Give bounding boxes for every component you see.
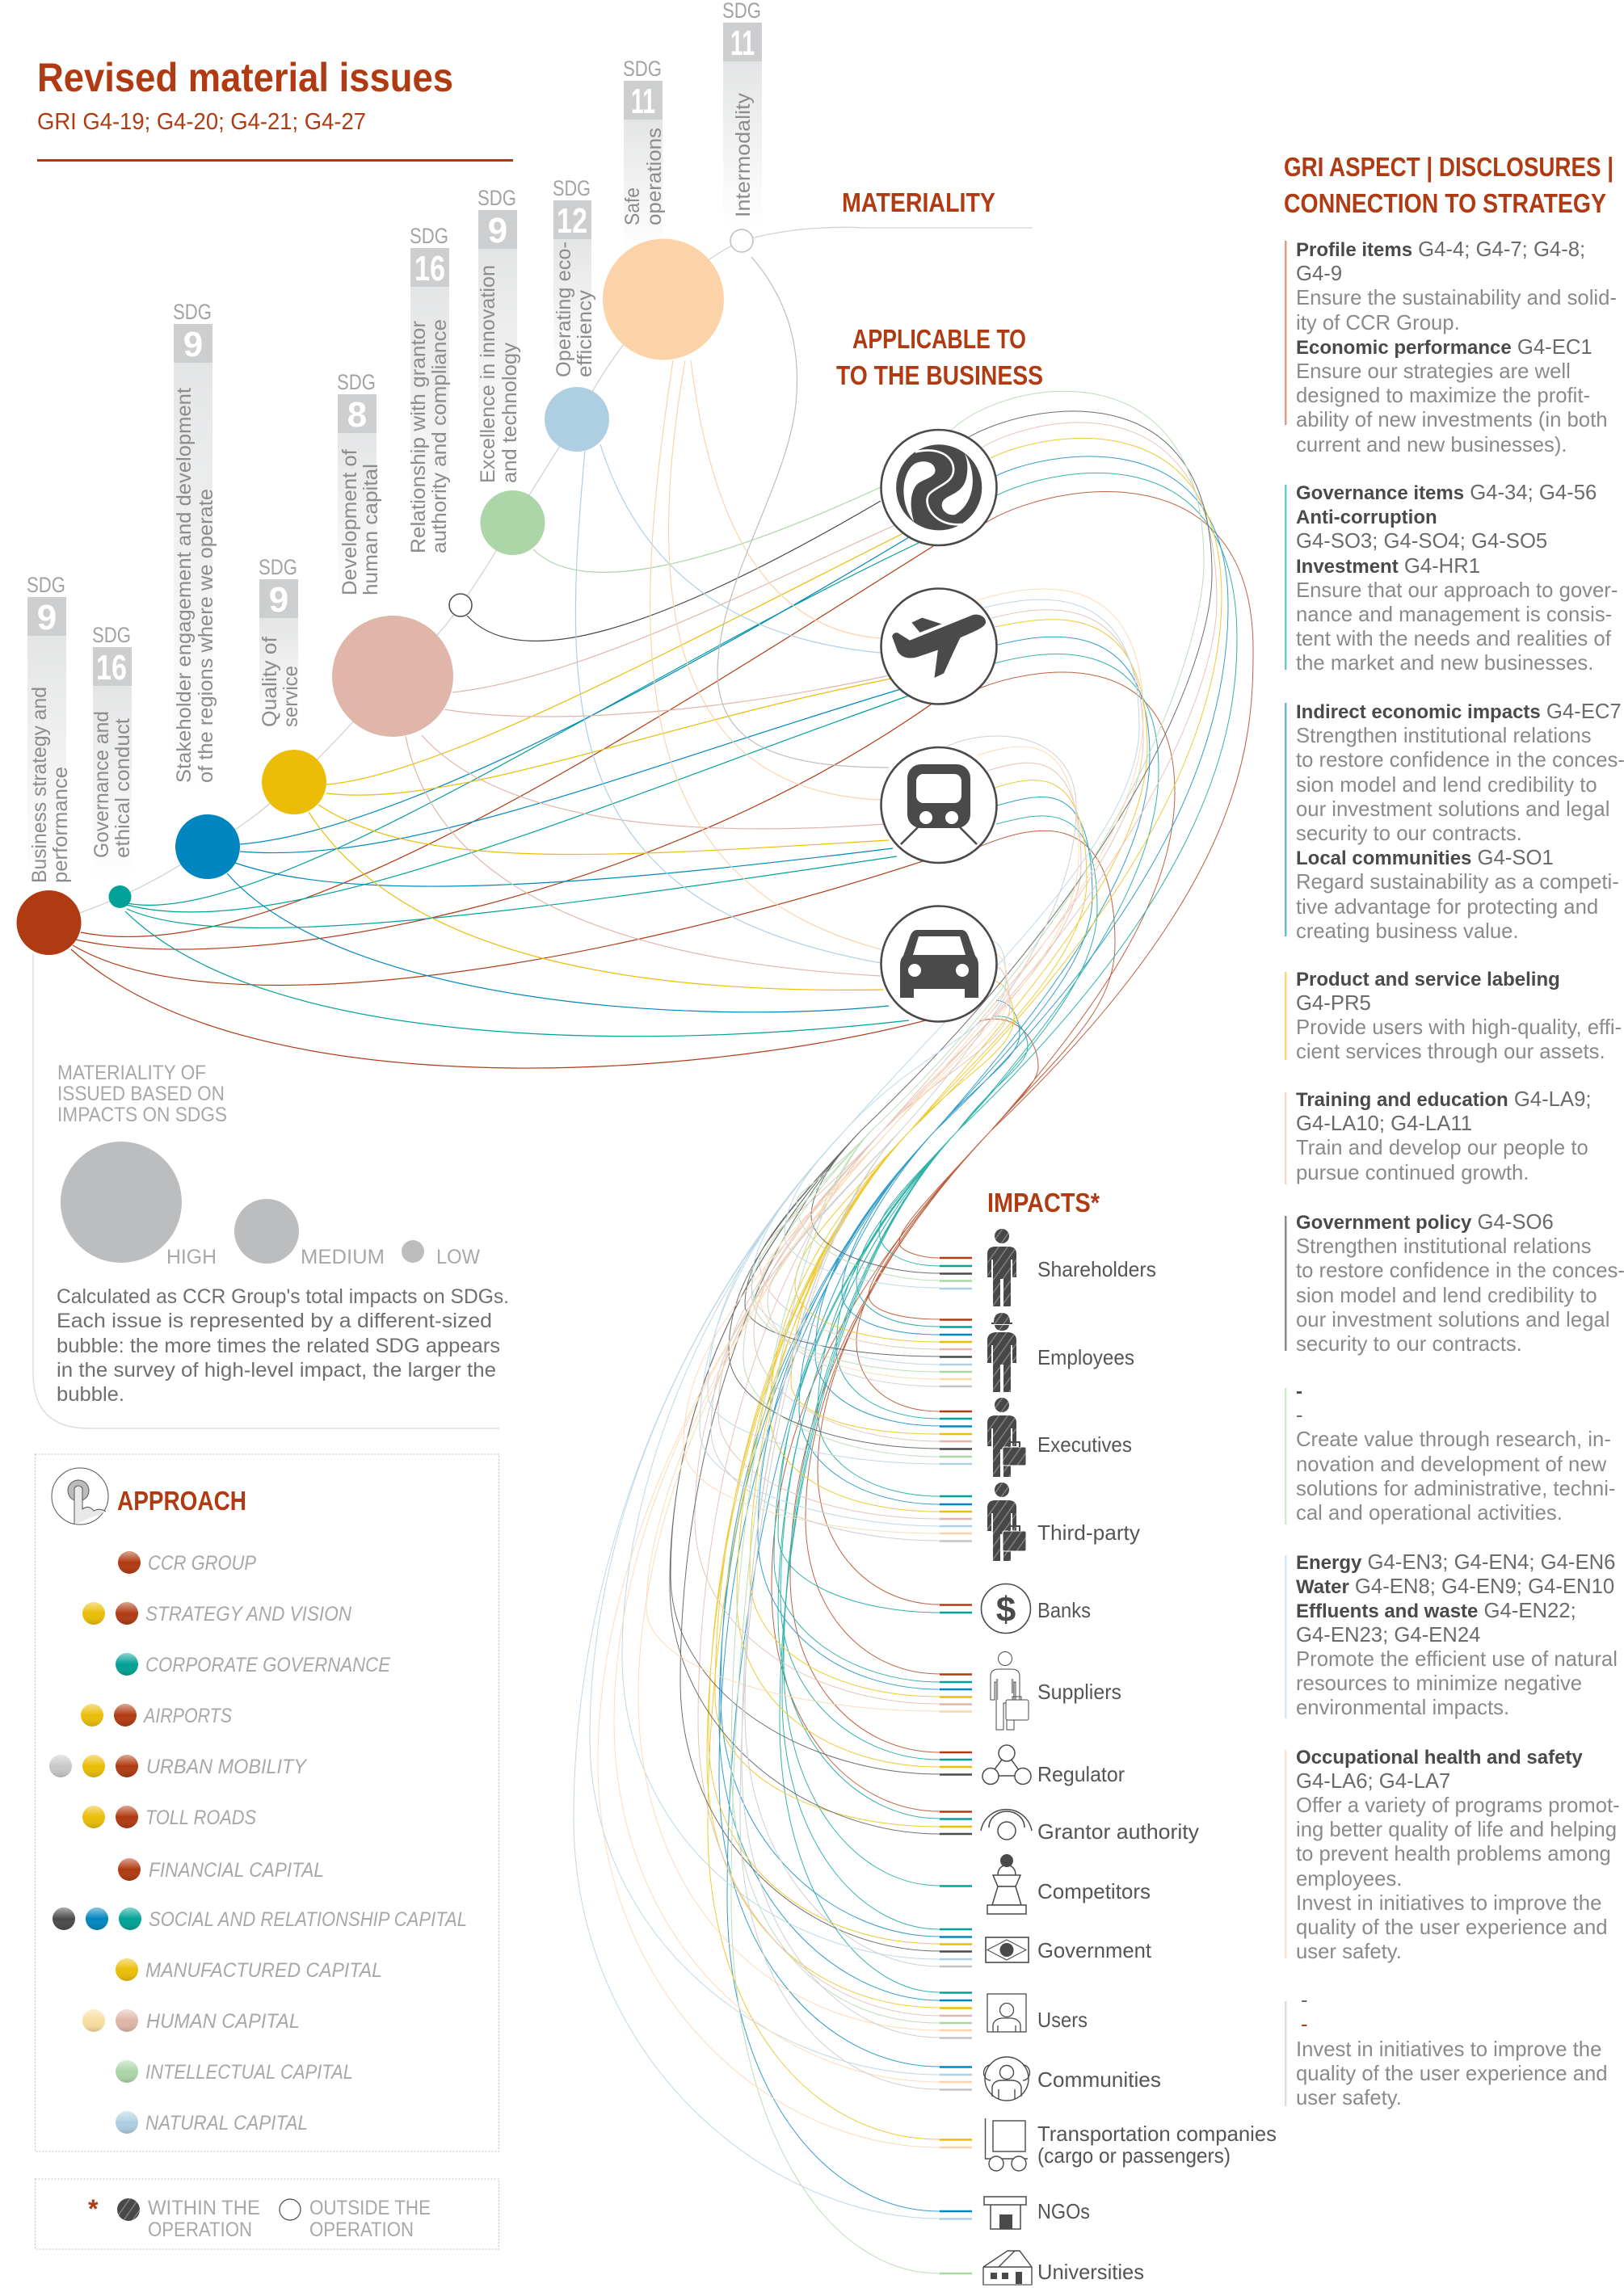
heading: applicable to the business: TO THE BUSINESS bbox=[836, 360, 1043, 390]
legend: within or outside the operation: OUTSIDE THE bbox=[309, 2197, 431, 2219]
stakeholder: communities: Communities bbox=[1037, 2067, 1161, 2092]
approach row: human capital bbox=[82, 2009, 300, 2033]
text block: profile and economic performance bbox=[1285, 238, 1617, 456]
text block: product and service labeling bbox=[1285, 969, 1622, 1063]
text block: occupational health and safety: employees. bbox=[1296, 1868, 1402, 1891]
approach row: corporate governance: CORPORATE GOVERNANCE bbox=[145, 1654, 390, 1676]
text block: government policy: security to our contracts. bbox=[1296, 1333, 1522, 1356]
text block: profile and economic performance: Ensure our strategies are well bbox=[1296, 360, 1571, 383]
text block: user experience: - bbox=[1301, 1989, 1308, 2012]
legend: materiality of issues bbox=[57, 1062, 480, 1268]
text block: occupational health and safety: Invest in initiatives to improve the bbox=[1296, 1892, 1601, 1915]
text block: governance: the market and new businesses. bbox=[1296, 652, 1593, 675]
text block: governance: Ensure that our approach to gover- bbox=[1296, 579, 1618, 602]
stakeholder: banks bbox=[940, 1584, 1091, 1634]
SDG column: Safe operations: 11 bbox=[631, 82, 655, 121]
SDG column: Safe operations: SDG bbox=[623, 57, 662, 81]
legend: within or outside the operation: OPERATION bbox=[148, 2219, 252, 2241]
SDG column: Governance and ethical conduct: 16 bbox=[96, 648, 127, 688]
text block: occupational health and safety bbox=[1285, 1747, 1620, 1963]
text block: profile and economic performance: Economic performance G4-EC1 bbox=[1296, 336, 1592, 359]
approach row: airports bbox=[81, 1704, 232, 1727]
text block: training and education: Train and develop our people to bbox=[1296, 1137, 1588, 1159]
stakeholder: users: Users bbox=[1037, 2008, 1088, 2032]
text block: profile and economic performance: G4-9 bbox=[1296, 263, 1342, 285]
heading: materiality: MATERIALITY bbox=[842, 187, 995, 217]
text block: training and education bbox=[1285, 1088, 1592, 1184]
SDG column: Operating eco-efficiency: SDG bbox=[553, 176, 591, 200]
SDG column: Quality of service bbox=[259, 555, 302, 731]
text block: governance: Investment G4-HR1 bbox=[1296, 555, 1480, 578]
text block: indirect economic impacts: security to our contracts. bbox=[1296, 822, 1522, 845]
stakeholder: regulator bbox=[940, 1745, 1125, 1786]
approach row: social and relationship capital bbox=[53, 1907, 467, 1931]
text: materiality calculation note: Calculated as CCR Group's total impacts on SDGs. bbox=[57, 1285, 509, 1308]
SDG column: Business strategy and performance: performance bbox=[49, 767, 72, 883]
approach row: strategy and vision bbox=[82, 1602, 352, 1626]
text block: user experience: Invest in initiatives to improve the bbox=[1296, 2038, 1601, 2061]
legend: within or outside the operation: WITHIN THE bbox=[148, 2197, 260, 2219]
SDG column: Excellence in innovation: SDG bbox=[478, 186, 516, 210]
SDG column: Stakeholder engagement: Stakeholder engagement and development bbox=[173, 388, 196, 783]
legend: within or outside the operation bbox=[36, 2179, 499, 2249]
stakeholder: NGOs: NGOs bbox=[1037, 2199, 1090, 2223]
text block: government policy: sion model and lend credibility to bbox=[1296, 1285, 1597, 1307]
stakeholder: NGOs bbox=[940, 2197, 1090, 2229]
SDG column: Development of human capital: SDG bbox=[337, 370, 376, 394]
text block: user experience: user safety. bbox=[1296, 2087, 1402, 2109]
stakeholder: transportation companies: (cargo or passengers) bbox=[1037, 2143, 1231, 2168]
text block: occupational health and safety: user safety. bbox=[1296, 1941, 1402, 1963]
text block: occupational health and safety: G4-LA6; G4-LA7 bbox=[1296, 1770, 1450, 1793]
icon: car bbox=[881, 906, 997, 1021]
approach row: human capital: HUMAN CAPITAL bbox=[146, 2010, 300, 2033]
SDG column: Development of human capital: 8 bbox=[347, 395, 367, 435]
SDG column: Intermodality: Intermodality bbox=[732, 92, 755, 217]
stakeholder: competitors bbox=[940, 1854, 1151, 1914]
SDG column: Development of human capital: Development of bbox=[339, 449, 361, 595]
text block: governance: Governance items G4-34; G4-56 bbox=[1296, 482, 1597, 504]
SDG column: Excellence in innovation: 9 bbox=[488, 211, 507, 250]
legend: materiality of issues: HIGH bbox=[166, 1246, 217, 1268]
legend: materiality of issues: MEDIUM bbox=[301, 1246, 385, 1268]
SDG column: Stakeholder engagement bbox=[173, 300, 217, 791]
text block: indirect economic impacts: Regard sustainability as a competi- bbox=[1296, 871, 1619, 894]
text block: energy, water, effluents: Promote the efficient use of natural bbox=[1296, 1648, 1618, 1671]
stakeholder: transportation companies bbox=[940, 2118, 1277, 2171]
SDG column: Intermodality bbox=[722, 0, 762, 227]
SDG column: Business strategy and performance: SDG bbox=[27, 573, 65, 597]
heading: approach: APPROACH bbox=[117, 1486, 246, 1516]
curves: issues to business units bbox=[71, 257, 933, 1068]
text block: research and innovation: solutions for administrative, techni- bbox=[1296, 1478, 1615, 1500]
subtitle: GRI references: GRI G4-19; G4-20; G4-21; G4-27 bbox=[37, 109, 366, 135]
text block: government policy: Strengthen institutional relations bbox=[1296, 1235, 1592, 1258]
text block: research and innovation: novation and development of new bbox=[1296, 1453, 1607, 1476]
text block: profile and economic performance: Profile items G4-4; G4-7; G4-8; bbox=[1296, 238, 1585, 261]
stakeholder: executives bbox=[940, 1398, 1132, 1477]
SDG column: Governance and ethical conduct: SDG bbox=[92, 623, 131, 647]
SDG column: Relationship with grantor: Relationship with grantor bbox=[407, 321, 430, 553]
SDG column: Intermodality: 11 bbox=[730, 23, 755, 63]
heading: impacts: IMPACTS* bbox=[987, 1188, 1100, 1218]
SDG column: Development of human capital: human capital bbox=[360, 464, 382, 595]
text block: energy, water, effluents: Water G4-EN8; G4-EN9; G4-EN10 bbox=[1296, 1575, 1614, 1598]
approach row: manufactured capital: MANUFACTURED CAPITAL bbox=[145, 1959, 382, 1982]
approach row: financial capital: FINANCIAL CAPITAL bbox=[149, 1859, 324, 1882]
text: materiality calculation note: bubble. bbox=[57, 1383, 124, 1406]
text block: governance: Anti-corruption bbox=[1296, 507, 1437, 528]
icon: train bbox=[881, 747, 997, 863]
heading: GRI aspect column bbox=[1284, 152, 1613, 218]
SDG column: Excellence in innovation bbox=[477, 186, 521, 487]
SDG column: Governance and ethical conduct bbox=[90, 623, 134, 880]
stakeholder: executives: Executives bbox=[1037, 1432, 1132, 1457]
SDG column: Business strategy and performance: Business strategy and bbox=[28, 687, 51, 883]
text block: training and education: pursue continued growth. bbox=[1296, 1162, 1529, 1184]
icon: airplane bbox=[881, 588, 997, 704]
SDG column: Relationship with grantor: authority and compliance bbox=[428, 319, 451, 553]
SDG column: Operating eco-efficiency: Operating eco- bbox=[553, 242, 575, 377]
SDG column: Quality of service: 9 bbox=[269, 580, 288, 620]
panel: approach bbox=[36, 1454, 499, 2151]
legend: within or outside the operation: OPERATION bbox=[309, 2219, 414, 2241]
SDG column: Excellence in innovation: and technology bbox=[499, 343, 521, 483]
text block: indirect economic impacts bbox=[1285, 700, 1624, 943]
stakeholder: suppliers bbox=[940, 1651, 1121, 1730]
stakeholder: shareholders bbox=[940, 1229, 1156, 1306]
approach row: airports: AIRPORTS bbox=[142, 1705, 232, 1727]
text: materiality calculation note: in the survey of high-level impact, the larger the bbox=[57, 1359, 496, 1382]
text block: occupational health and safety: Offer a variety of programs promot- bbox=[1296, 1794, 1620, 1817]
SDG column: Business strategy and performance bbox=[27, 573, 72, 886]
text block: user experience: quality of the user experience and bbox=[1296, 2063, 1608, 2085]
SDG column: Quality of service: Quality of bbox=[259, 637, 281, 727]
legend: materiality of issues: IMPACTS ON SDGS bbox=[57, 1104, 227, 1126]
text block: indirect economic impacts: our investment solutions and legal bbox=[1296, 798, 1609, 821]
legend: materiality of issues: LOW bbox=[436, 1246, 480, 1268]
text block: indirect economic impacts: to restore confidence in the conces- bbox=[1296, 749, 1624, 772]
SDG column: Safe operations bbox=[621, 57, 666, 253]
text block: indirect economic impacts: Local communities G4-SO1 bbox=[1296, 847, 1554, 869]
stakeholder: users bbox=[940, 1992, 1088, 2038]
stakeholder: third-party: Third-party bbox=[1037, 1520, 1140, 1545]
text block: governance bbox=[1285, 482, 1618, 675]
text block: profile and economic performance: ity of CCR Group. bbox=[1296, 312, 1460, 334]
SDG column: Safe operations: Safe bbox=[621, 187, 644, 225]
text block: indirect economic impacts: sion model and lend credibility to bbox=[1296, 774, 1597, 797]
text block: government policy: Government policy G4-SO6 bbox=[1296, 1211, 1554, 1234]
text block: research and innovation: - bbox=[1296, 1381, 1302, 1403]
SDG column: Excellence in innovation: Excellence in innovation bbox=[477, 265, 499, 483]
text block: occupational health and safety: to prevent health problems among bbox=[1296, 1843, 1611, 1865]
text block: indirect economic impacts: Strengthen institutional relations bbox=[1296, 725, 1592, 747]
heading: applicable to the business bbox=[836, 324, 1043, 390]
text block: product and service labeling: Product and service labeling bbox=[1296, 969, 1560, 990]
stakeholder: banks: Banks bbox=[1037, 1598, 1091, 1622]
text block: occupational health and safety: quality of the user experience and bbox=[1296, 1916, 1608, 1939]
text block: product and service labeling: cient services through our assets. bbox=[1296, 1041, 1605, 1063]
SDG column: Development of human capital bbox=[337, 370, 382, 601]
stakeholder: government: Government bbox=[1037, 1938, 1152, 1962]
SDG column: Operating eco-efficiency: 12 bbox=[557, 201, 587, 241]
SDG column: Quality of service: SDG bbox=[259, 555, 297, 579]
approach row: CCR Group bbox=[118, 1551, 256, 1575]
materiality chain line bbox=[48, 227, 1033, 923]
text block: governance: tent with the needs and realities of bbox=[1296, 628, 1612, 650]
text: materiality calculation note: Each issue is represented by a different-sized bbox=[57, 1310, 492, 1332]
text block: energy, water, effluents bbox=[1285, 1551, 1618, 1719]
text block: government policy: our investment solutions and legal bbox=[1296, 1309, 1609, 1331]
stakeholder: suppliers: Suppliers bbox=[1037, 1680, 1121, 1704]
stakeholder: grantor authority bbox=[940, 1810, 1199, 1844]
SDG column: Quality of service: service bbox=[280, 666, 302, 727]
text block: research and innovation: - bbox=[1296, 1404, 1303, 1427]
approach row: intellectual capital: INTELLECTUAL CAPITAL bbox=[145, 2061, 353, 2084]
text block: occupational health and safety: ing better quality of life and helping bbox=[1296, 1819, 1617, 1841]
text block: occupational health and safety: Occupational health and safety bbox=[1296, 1747, 1583, 1769]
text block: energy, water, effluents: Energy G4-EN3; G4-EN4; G4-EN6 bbox=[1296, 1551, 1615, 1574]
text block: energy, water, effluents: resources to minimize negative bbox=[1296, 1672, 1582, 1695]
legend: within or outside the operation: * bbox=[88, 2194, 99, 2223]
stakeholder: employees bbox=[940, 1313, 1134, 1392]
SDG column: Business strategy and performance: 9 bbox=[37, 598, 57, 637]
stakeholder: universities: Universities bbox=[1037, 2260, 1144, 2284]
text block: profile and economic performance: ability of new investments (in both bbox=[1296, 409, 1608, 431]
curves: business units to stakeholders bbox=[574, 391, 1253, 2273]
approach row: urban mobility: URBAN MOBILITY bbox=[146, 1756, 308, 1778]
panel outline: materiality legend bbox=[33, 953, 499, 1428]
stakeholder: competitors: Competitors bbox=[1037, 1879, 1151, 1903]
title: Revised material issues bbox=[37, 55, 453, 100]
text block: training and education: Training and education G4-LA9; bbox=[1296, 1088, 1592, 1111]
SDG column: Stakeholder engagement: of the regions where we operate bbox=[195, 489, 217, 783]
stakeholder: third-party bbox=[940, 1483, 1140, 1561]
text block: indirect economic impacts: tive advantage for protecting and bbox=[1296, 896, 1598, 919]
icon: CCR Group swirl bbox=[881, 430, 997, 545]
SDG column: Relationship with grantor: 16 bbox=[414, 249, 445, 288]
SDG column: Stakeholder engagement: SDG bbox=[173, 300, 212, 324]
text block: profile and economic performance: Ensure the sustainability and solid- bbox=[1296, 287, 1617, 309]
text: materiality calculation note bbox=[57, 1285, 509, 1406]
text block: government policy bbox=[1285, 1211, 1624, 1356]
SDG column: Safe operations: operations bbox=[643, 128, 666, 225]
legend: materiality of issues: ISSUED BASED ON bbox=[57, 1083, 225, 1105]
text block: profile and economic performance: current and new businesses). bbox=[1296, 434, 1567, 456]
stakeholder: universities bbox=[940, 2251, 1144, 2286]
text block: profile and economic performance: designed to maximize the profit- bbox=[1296, 385, 1590, 407]
text block: research and innovation: Create value through research, in- bbox=[1296, 1428, 1611, 1451]
stakeholder: transportation companies: Transportation companies bbox=[1037, 2122, 1277, 2146]
approach row: natural capital: NATURAL CAPITAL bbox=[145, 2112, 308, 2134]
bubbles: material issues bbox=[16, 229, 753, 955]
text block: product and service labeling: Provide users with high-quality, effi- bbox=[1296, 1016, 1622, 1039]
stakeholder: banks: $ bbox=[996, 1590, 1016, 1630]
legend: materiality of issues: MATERIALITY OF bbox=[57, 1062, 206, 1084]
text block: energy, water, effluents: G4-EN23; G4-EN24 bbox=[1296, 1624, 1480, 1647]
stakeholder: communities bbox=[940, 2057, 1161, 2101]
SDG column: Relationship with grantor bbox=[407, 224, 451, 561]
approach row: CCR Group: CCR GROUP bbox=[148, 1552, 256, 1575]
stakeholder: shareholders: Shareholders bbox=[1037, 1257, 1156, 1281]
SDG column: Operating eco-efficiency: efficiency bbox=[574, 289, 596, 377]
icon: touch bbox=[52, 1468, 108, 1525]
text block: training and education: G4-LA10; G4-LA11 bbox=[1296, 1112, 1472, 1135]
text block: user experience bbox=[1285, 1989, 1608, 2109]
approach row: social and relationship capital: SOCIAL AND RELATIONSHIP CAPITAL bbox=[149, 1908, 467, 1931]
SDG column: Stakeholder engagement: 9 bbox=[183, 325, 203, 364]
stakeholder: government bbox=[940, 1929, 1152, 1966]
stakeholder: regulator: Regulator bbox=[1037, 1762, 1125, 1786]
text block: governance: nance and management is consis- bbox=[1296, 604, 1612, 626]
text block: indirect economic impacts: creating business value. bbox=[1296, 920, 1519, 943]
text block: government policy: to restore confidence in the conces- bbox=[1296, 1260, 1624, 1282]
approach row: toll roads bbox=[82, 1806, 256, 1829]
text block: indirect economic impacts: Indirect economic impacts G4-EC7 bbox=[1296, 700, 1622, 723]
SDG column: Governance and ethical conduct: Governance and bbox=[90, 711, 113, 858]
text block: energy, water, effluents: environmental impacts. bbox=[1296, 1697, 1509, 1719]
text block: user experience: - bbox=[1301, 2013, 1308, 2036]
text block: governance: G4-SO3; G4-SO4; G4-SO5 bbox=[1296, 530, 1547, 553]
text: materiality calculation note: bubble: the more times the related SDG appears bbox=[57, 1335, 500, 1357]
text block: product and service labeling: G4-PR5 bbox=[1296, 992, 1371, 1015]
SDG column: Operating eco-efficiency bbox=[553, 176, 596, 381]
SDG column: Governance and ethical conduct: ethical conduct bbox=[111, 718, 134, 858]
text block: research and innovation bbox=[1285, 1381, 1615, 1525]
stakeholder: employees: Employees bbox=[1037, 1345, 1134, 1369]
approach row: urban mobility bbox=[49, 1755, 308, 1778]
heading: applicable to the business: APPLICABLE TO bbox=[852, 324, 1026, 354]
stakeholder: grantor authority: Grantor authority bbox=[1037, 1819, 1199, 1844]
SDG column: Relationship with grantor: SDG bbox=[410, 224, 448, 248]
text block: energy, water, effluents: Effluents and waste G4-EN22; bbox=[1296, 1600, 1576, 1622]
approach row: toll roads: TOLL ROADS bbox=[145, 1806, 256, 1829]
text block: research and innovation: cal and operational activities. bbox=[1296, 1502, 1563, 1525]
approach row: strategy and vision: STRATEGY AND VISION bbox=[145, 1603, 352, 1626]
